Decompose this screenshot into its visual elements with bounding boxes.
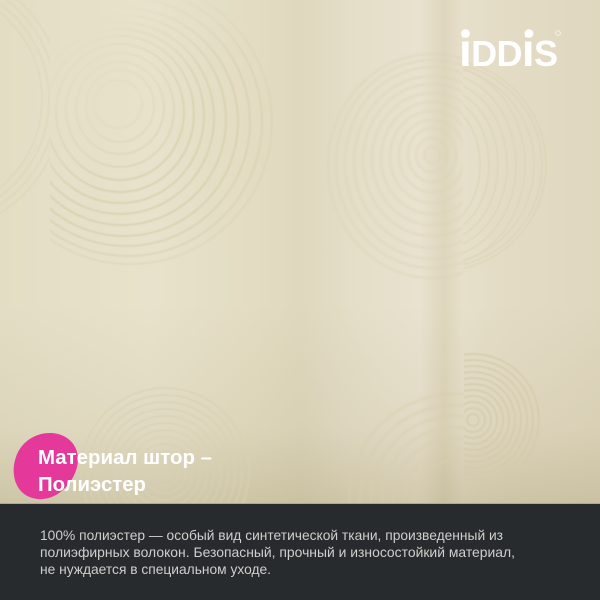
lower centre spiral pattern	[378, 394, 463, 436]
upper right spiral pattern, right of fold	[463, 62, 537, 269]
heading: Материал штор –	[38, 446, 212, 469]
dark footer panel	[0, 503, 600, 600]
description text: полиэфирных волокон. Безопасный, прочный и износостойкий материал,	[40, 544, 515, 560]
pink accent blob	[14, 433, 78, 499]
heading	[38, 446, 212, 496]
lower right spiral pattern	[464, 353, 540, 468]
upper left spiral pattern	[50, 20, 268, 265]
lower left spiral pattern	[95, 388, 202, 436]
logo: IDDIS: iDDiS	[459, 24, 558, 76]
upper right spiral pattern, left of fold	[376, 54, 426, 278]
description text: не нуждается в специальном уходе.	[40, 561, 271, 577]
description text	[40, 527, 515, 577]
heading: Полиэстер	[38, 473, 146, 496]
description text: 100% полиэстер — особый вид синтетической ткани, произведенный из	[40, 527, 503, 543]
far left spiral pattern	[0, 0, 50, 213]
